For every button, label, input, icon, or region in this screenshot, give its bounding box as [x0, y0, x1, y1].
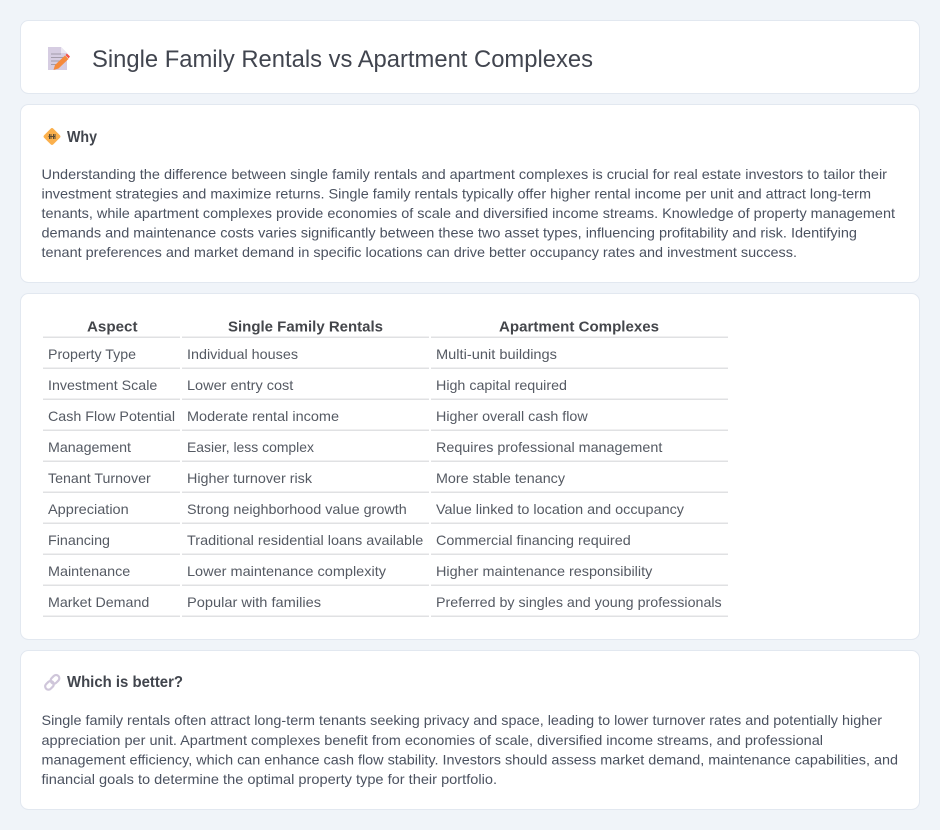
- row: maintenance: Maintenance: [48, 563, 131, 579]
- row: property type: Multi-unit buildings: [436, 346, 557, 362]
- row: management: Management: [48, 439, 131, 455]
- row: investment scale: High capital required: [436, 377, 567, 393]
- row: maintenance: Higher maintenance responsibility: [436, 563, 652, 579]
- why paragraph: Understanding the difference between single family rentals and apartment complexes is crucial for real estate investors to tailor their: [42, 166, 887, 182]
- row: management: [43, 439, 728, 462]
- icon: chain link: [44, 674, 61, 691]
- row: appreciation: Strong neighborhood value growth: [187, 501, 407, 517]
- table header row: Apartment Complexes: [499, 320, 659, 336]
- row: financing: Commercial financing required: [436, 532, 631, 548]
- panel: title header: [20, 20, 920, 94]
- which is better paragraph: [42, 712, 898, 787]
- why paragraph: tenants, while apartment complexes provide economies of scale and diversified income streams. Knowledge of property management: [42, 205, 895, 221]
- which is better paragraph: financial goals to determine the optimal property type for their portfolio.: [42, 771, 497, 787]
- row: market demand: Preferred by singles and young professionals: [436, 594, 722, 610]
- table header row: Single Family Rentals: [228, 320, 383, 336]
- table header row: Aspect: [87, 320, 138, 336]
- row: financing: [43, 532, 728, 555]
- heading: why: Why: [67, 129, 97, 146]
- row: market demand: Popular with families: [187, 594, 321, 610]
- why paragraph: [42, 166, 895, 260]
- row: property type: [43, 346, 728, 369]
- panel: which is better: [20, 650, 920, 810]
- which is better paragraph: appreciation per unit. Apartment complexes benefit from economies of scale, diversified income streams, and professional: [42, 732, 823, 748]
- row: property type: Individual houses: [187, 346, 298, 362]
- row: tenant turnover: [43, 470, 728, 493]
- title: Single Family Rentals vs Apartment Complexes: [92, 46, 593, 73]
- which is better paragraph: Single family rentals often attract long-term tenants seeking privacy and space, leading to lower turnover rates and potentially higher: [42, 712, 882, 728]
- row: investment scale: Investment Scale: [48, 377, 158, 393]
- why paragraph: investment strategies and maximize returns. Single family rentals typically offer higher rental income per unit and attract long-term: [42, 186, 871, 202]
- row: property type: Property Type: [48, 346, 136, 362]
- row: management: Requires professional management: [436, 439, 662, 455]
- icon: document with pencil: [48, 47, 70, 70]
- row: tenant turnover: Higher turnover risk: [187, 470, 313, 486]
- why paragraph: demands and maintenance costs varies significantly between these two asset types, influencing profitability and risk. Identifying: [42, 224, 857, 240]
- row: cash flow potential: Higher overall cash flow: [436, 408, 589, 424]
- which is better paragraph: management efficiency, which can enhance cash flow stability. Investors should assess market demand, maintenance capabilities, and: [42, 752, 898, 768]
- row: cash flow potential: Cash Flow Potential: [48, 408, 175, 424]
- panel: comparison table: [20, 294, 920, 640]
- table header row: [43, 320, 728, 338]
- row: investment scale: [43, 377, 728, 400]
- row: financing: Financing: [48, 532, 110, 548]
- row: management: Easier, less complex: [187, 439, 314, 455]
- row: maintenance: Lower maintenance complexity: [187, 563, 386, 579]
- row: financing: Traditional residential loans available: [187, 532, 424, 548]
- row: appreciation: Value linked to location and occupancy: [436, 501, 684, 517]
- heading: which is better: Which is better?: [67, 674, 183, 691]
- row: tenant turnover: Tenant Turnover: [48, 470, 151, 486]
- row: cash flow potential: [43, 408, 728, 431]
- panel: why: [20, 104, 920, 282]
- row: cash flow potential: Moderate rental income: [187, 408, 339, 424]
- why paragraph: tenant preferences and market demand in specific locations can drive better occupancy rates and investment success.: [42, 244, 797, 260]
- row: appreciation: [43, 501, 728, 524]
- row: tenant turnover: More stable tenancy: [436, 470, 565, 486]
- row: appreciation: Appreciation: [48, 501, 129, 517]
- row: maintenance: [43, 563, 728, 586]
- row: investment scale: Lower entry cost: [187, 377, 293, 393]
- row: market demand: [43, 594, 728, 617]
- row: market demand: Market Demand: [48, 594, 149, 610]
- icon: diamond sign: [43, 127, 61, 146]
